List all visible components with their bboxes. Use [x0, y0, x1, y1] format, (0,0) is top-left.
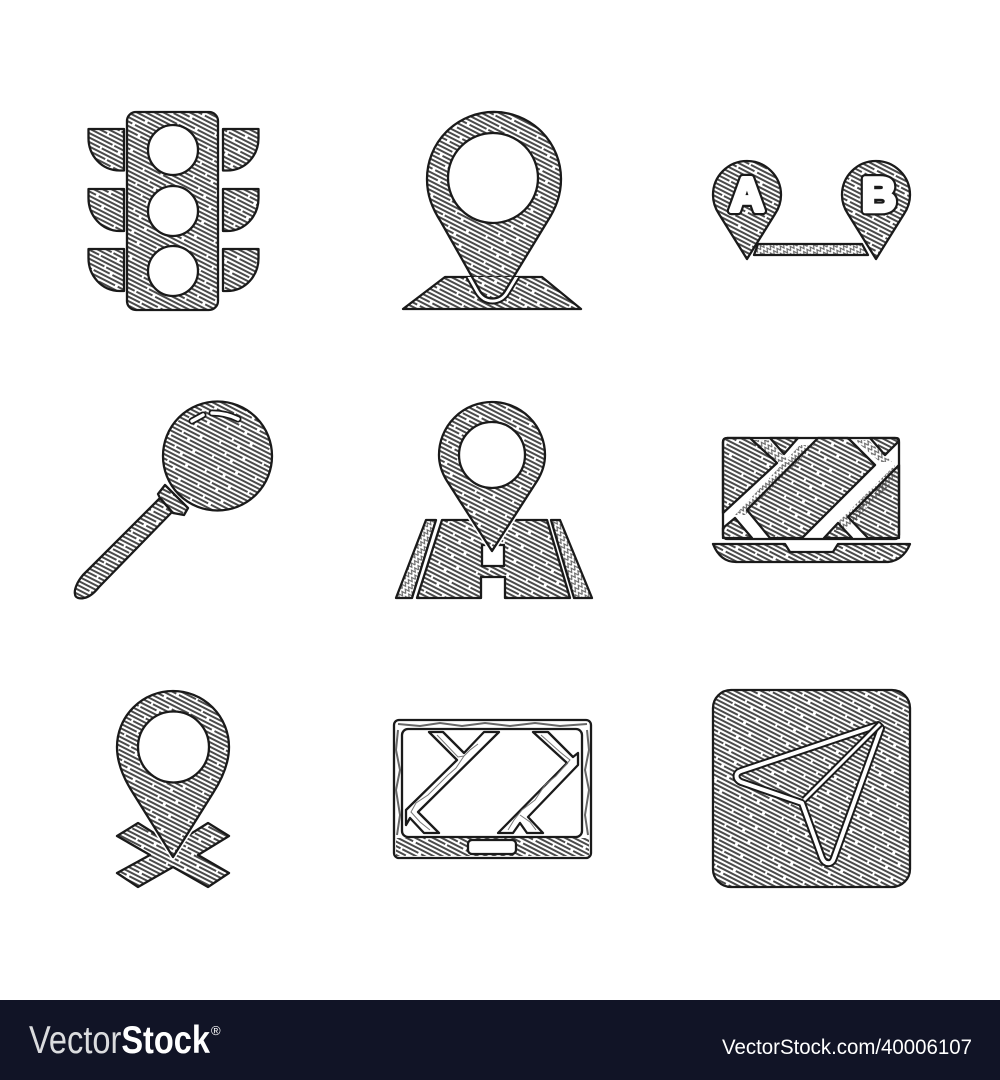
- icon: location pin on folded map: [396, 398, 592, 598]
- image id: VectorStock.com/40006107: [722, 1036, 972, 1059]
- icon: laptop with map: [713, 438, 910, 562]
- logo: VectorStock: VectorStock: [29, 1019, 210, 1062]
- letter A: A: [730, 168, 764, 221]
- icon: paper plane in rounded square: [713, 690, 910, 887]
- icon: location pin on map: [403, 112, 581, 309]
- letter B: B: [862, 168, 896, 221]
- footer bar: [0, 1000, 1000, 1080]
- icon: pin on crossroads: [114, 688, 232, 887]
- letter B: B: [862, 168, 896, 221]
- letter A: A: [730, 168, 764, 221]
- icon: tablet with map: [394, 720, 591, 858]
- registered mark: ®: [211, 1023, 221, 1038]
- icon: push pin: [75, 402, 272, 598]
- icon: traffic light: [88, 112, 258, 310]
- icon: route from A to B: [713, 161, 910, 259]
